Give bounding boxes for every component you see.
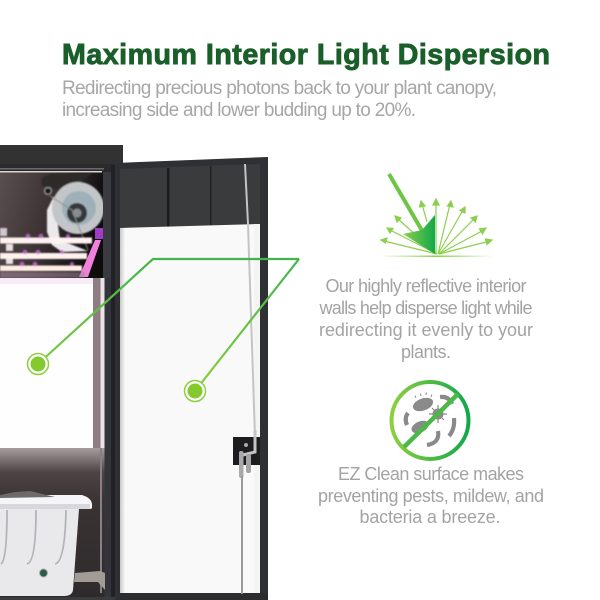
cabinet right inner post xyxy=(93,278,100,448)
reflective side panel xyxy=(0,278,93,448)
text: reflective walls: redirecting it evenly to your xyxy=(319,320,533,340)
text: EZ clean: preventing pests, mildew, and xyxy=(318,486,544,506)
grow cabinet photo xyxy=(0,145,268,600)
LED bars xyxy=(0,228,92,271)
text: reflective walls: plants. xyxy=(401,342,451,362)
incoming arrow xyxy=(389,174,435,254)
cabinet body top xyxy=(0,145,123,173)
callout line right xyxy=(195,259,299,391)
door dark upper panel xyxy=(120,164,260,228)
subtitle xyxy=(62,78,497,121)
text: EZ clean xyxy=(318,464,544,527)
callout marker right xyxy=(184,380,206,402)
text: reflective walls: Our highly reflective interior xyxy=(326,276,526,296)
icon: light dispersion xyxy=(380,174,493,257)
subtitle: Redirecting precious photons back to your plant canopy, xyxy=(62,78,497,99)
text: reflective walls xyxy=(318,276,533,362)
text: EZ clean: EZ Clean surface makes xyxy=(338,464,524,484)
subtitle: increasing side and lower budding up to 20%. xyxy=(62,100,416,121)
callout marker left xyxy=(28,354,48,374)
door rod and latch xyxy=(233,164,260,594)
callout line left xyxy=(38,259,299,364)
door white reflective panel xyxy=(120,224,260,593)
cabinet lower rear wall xyxy=(0,448,104,600)
shelf bottom xyxy=(74,571,105,590)
callout lines xyxy=(38,259,299,391)
text: reflective walls: walls help disperse light while xyxy=(318,298,532,318)
reservoir tub xyxy=(0,491,92,596)
pink mount xyxy=(79,240,101,277)
title: Maximum Interior Light Dispersion xyxy=(62,39,550,71)
open door frame xyxy=(115,157,268,600)
fan unit xyxy=(41,173,104,252)
cabinet interior rear wall xyxy=(0,172,103,278)
text: EZ clean: bacteria a breeze. xyxy=(360,507,500,527)
icon: no pests xyxy=(392,382,468,459)
